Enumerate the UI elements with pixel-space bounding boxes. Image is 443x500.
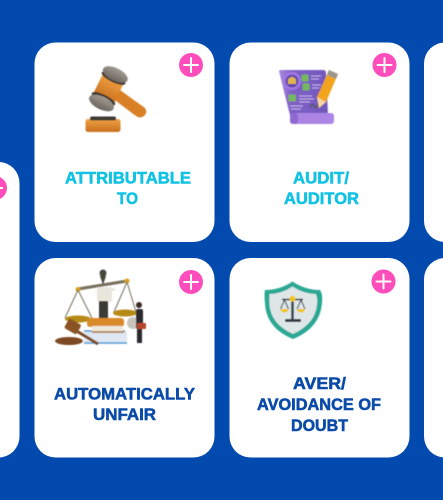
heading xyxy=(257,374,381,435)
icon: scales with figures xyxy=(55,270,146,345)
heading: AUTOMATICALLY xyxy=(54,384,196,404)
heading: DOUBT xyxy=(291,416,349,435)
heading: AUDITOR xyxy=(284,189,359,208)
heading xyxy=(54,384,196,424)
card: aver/avoidance of doubt xyxy=(230,258,410,458)
add button xyxy=(179,270,203,294)
card: attributable to xyxy=(34,42,214,242)
heading xyxy=(284,168,359,208)
heading xyxy=(65,168,191,208)
card: automatically unfair xyxy=(34,258,214,458)
add button xyxy=(372,53,396,77)
icon: gavel xyxy=(86,63,146,132)
card: audit/auditor xyxy=(230,42,410,242)
icon: audit scroll xyxy=(279,70,338,124)
card: partial left xyxy=(0,162,20,458)
card: partial right top xyxy=(424,42,443,242)
card: partial right bottom xyxy=(424,258,443,458)
icon: shield with scales xyxy=(264,282,322,339)
add button xyxy=(179,53,203,77)
heading: AUDIT/ xyxy=(293,168,349,188)
heading: AVER/ xyxy=(293,374,346,393)
heading: ATTRIBUTABLE xyxy=(65,168,191,188)
heading: AVOIDANCE OF xyxy=(257,395,381,414)
add button xyxy=(372,270,396,294)
heading: UNFAIR xyxy=(93,405,156,424)
heading: TO xyxy=(117,189,138,208)
